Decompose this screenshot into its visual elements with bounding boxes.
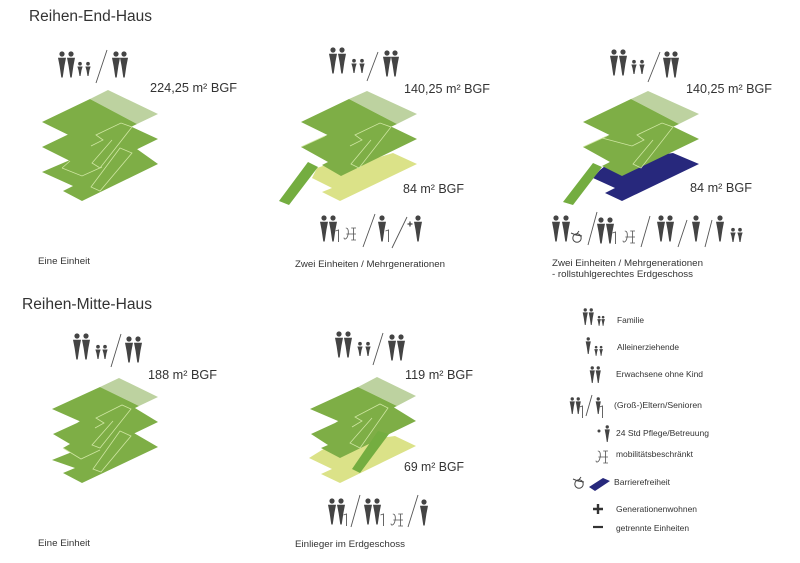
panel: end house, wheelchair accessible (552, 49, 772, 279)
caption: Eine Einheit (38, 538, 91, 548)
icons: upper household types (329, 47, 399, 81)
legend item: Barrierefreiheit: Barrierefreiheit (614, 478, 671, 487)
legend item: Erwachsene ohne Kind: Erwachsene ohne Kind (616, 370, 703, 379)
legend item: Senioren (570, 395, 702, 418)
legend (570, 308, 709, 533)
legend item: mobilitätsbeschränkt: mobilitätsbeschränkt (616, 450, 694, 459)
icons: lower household types (552, 212, 743, 247)
caption (552, 258, 703, 279)
floor area: 224,25 m² BGF (150, 81, 237, 95)
isometric floor stack (309, 377, 416, 483)
legend item: getrennte Einheiten: getrennte Einheiten (616, 524, 689, 533)
legend item: Senioren: (Groß-)Eltern/Senioren (614, 401, 702, 410)
legend item: 24 Std Pflege/Betreuung (598, 425, 709, 442)
caption: Zwei Einheiten / Mehrgenerationen (552, 258, 703, 268)
isometric floor stack (563, 91, 699, 205)
icons: lower household types (320, 214, 422, 248)
legend item: Familie (583, 308, 644, 326)
heading: Reihen-End-Haus: Reihen-End-Haus (29, 8, 152, 25)
legend item: mobilitätsbeschränkt (596, 450, 694, 463)
icons: lower household types (328, 495, 428, 527)
panel: middle house, one unit (38, 333, 217, 548)
lower floor area: 84 m² BGF (403, 182, 464, 196)
isometric floor stack (52, 378, 158, 483)
floor area: 188 m² BGF (148, 368, 217, 382)
legend item: Generationenwohnen (593, 504, 697, 514)
legend item: Alleinerziehende (586, 337, 679, 356)
lower floor area: 69 m² BGF (404, 460, 464, 474)
legend item: 24 Std Pflege/Betreuung: 24 Std Pflege/Betreuung (616, 429, 709, 438)
panel: end house, two units (279, 47, 490, 269)
isometric floor stack (279, 91, 417, 205)
icons: upper household types (610, 49, 679, 82)
caption: Eine Einheit (38, 256, 91, 266)
panel: end house, one unit (38, 50, 237, 266)
icons: household types (58, 50, 128, 83)
upper floor area: 119 m² BGF (405, 368, 473, 382)
isometric floor stack (42, 90, 158, 201)
heading: Reihen-Mitte-Haus: Reihen-Mitte-Haus (22, 296, 152, 313)
legend item: Barrierefreiheit (573, 477, 671, 491)
icons: household types (73, 333, 142, 367)
panel: middle house, granny flat (295, 331, 473, 549)
caption: Einlieger im Erdgeschoss (295, 539, 406, 549)
lower floor area: 84 m² BGF (690, 181, 752, 195)
legend item: Familie: Familie (617, 316, 644, 325)
caption: - rollstuhlgerechtes Erdgeschoss (552, 269, 694, 279)
legend item: Erwachsene ohne Kind (590, 366, 703, 383)
icons: upper household types (335, 331, 405, 365)
upper floor area: 140,25 m² BGF (404, 82, 490, 96)
legend item: Alleinerziehende: Alleinerziehende (617, 343, 679, 352)
upper floor area: 140,25 m² BGF (686, 82, 772, 96)
caption: Zwei Einheiten / Mehrgenerationen (295, 259, 445, 269)
legend item: Generationenwohnen: Generationenwohnen (616, 505, 697, 514)
